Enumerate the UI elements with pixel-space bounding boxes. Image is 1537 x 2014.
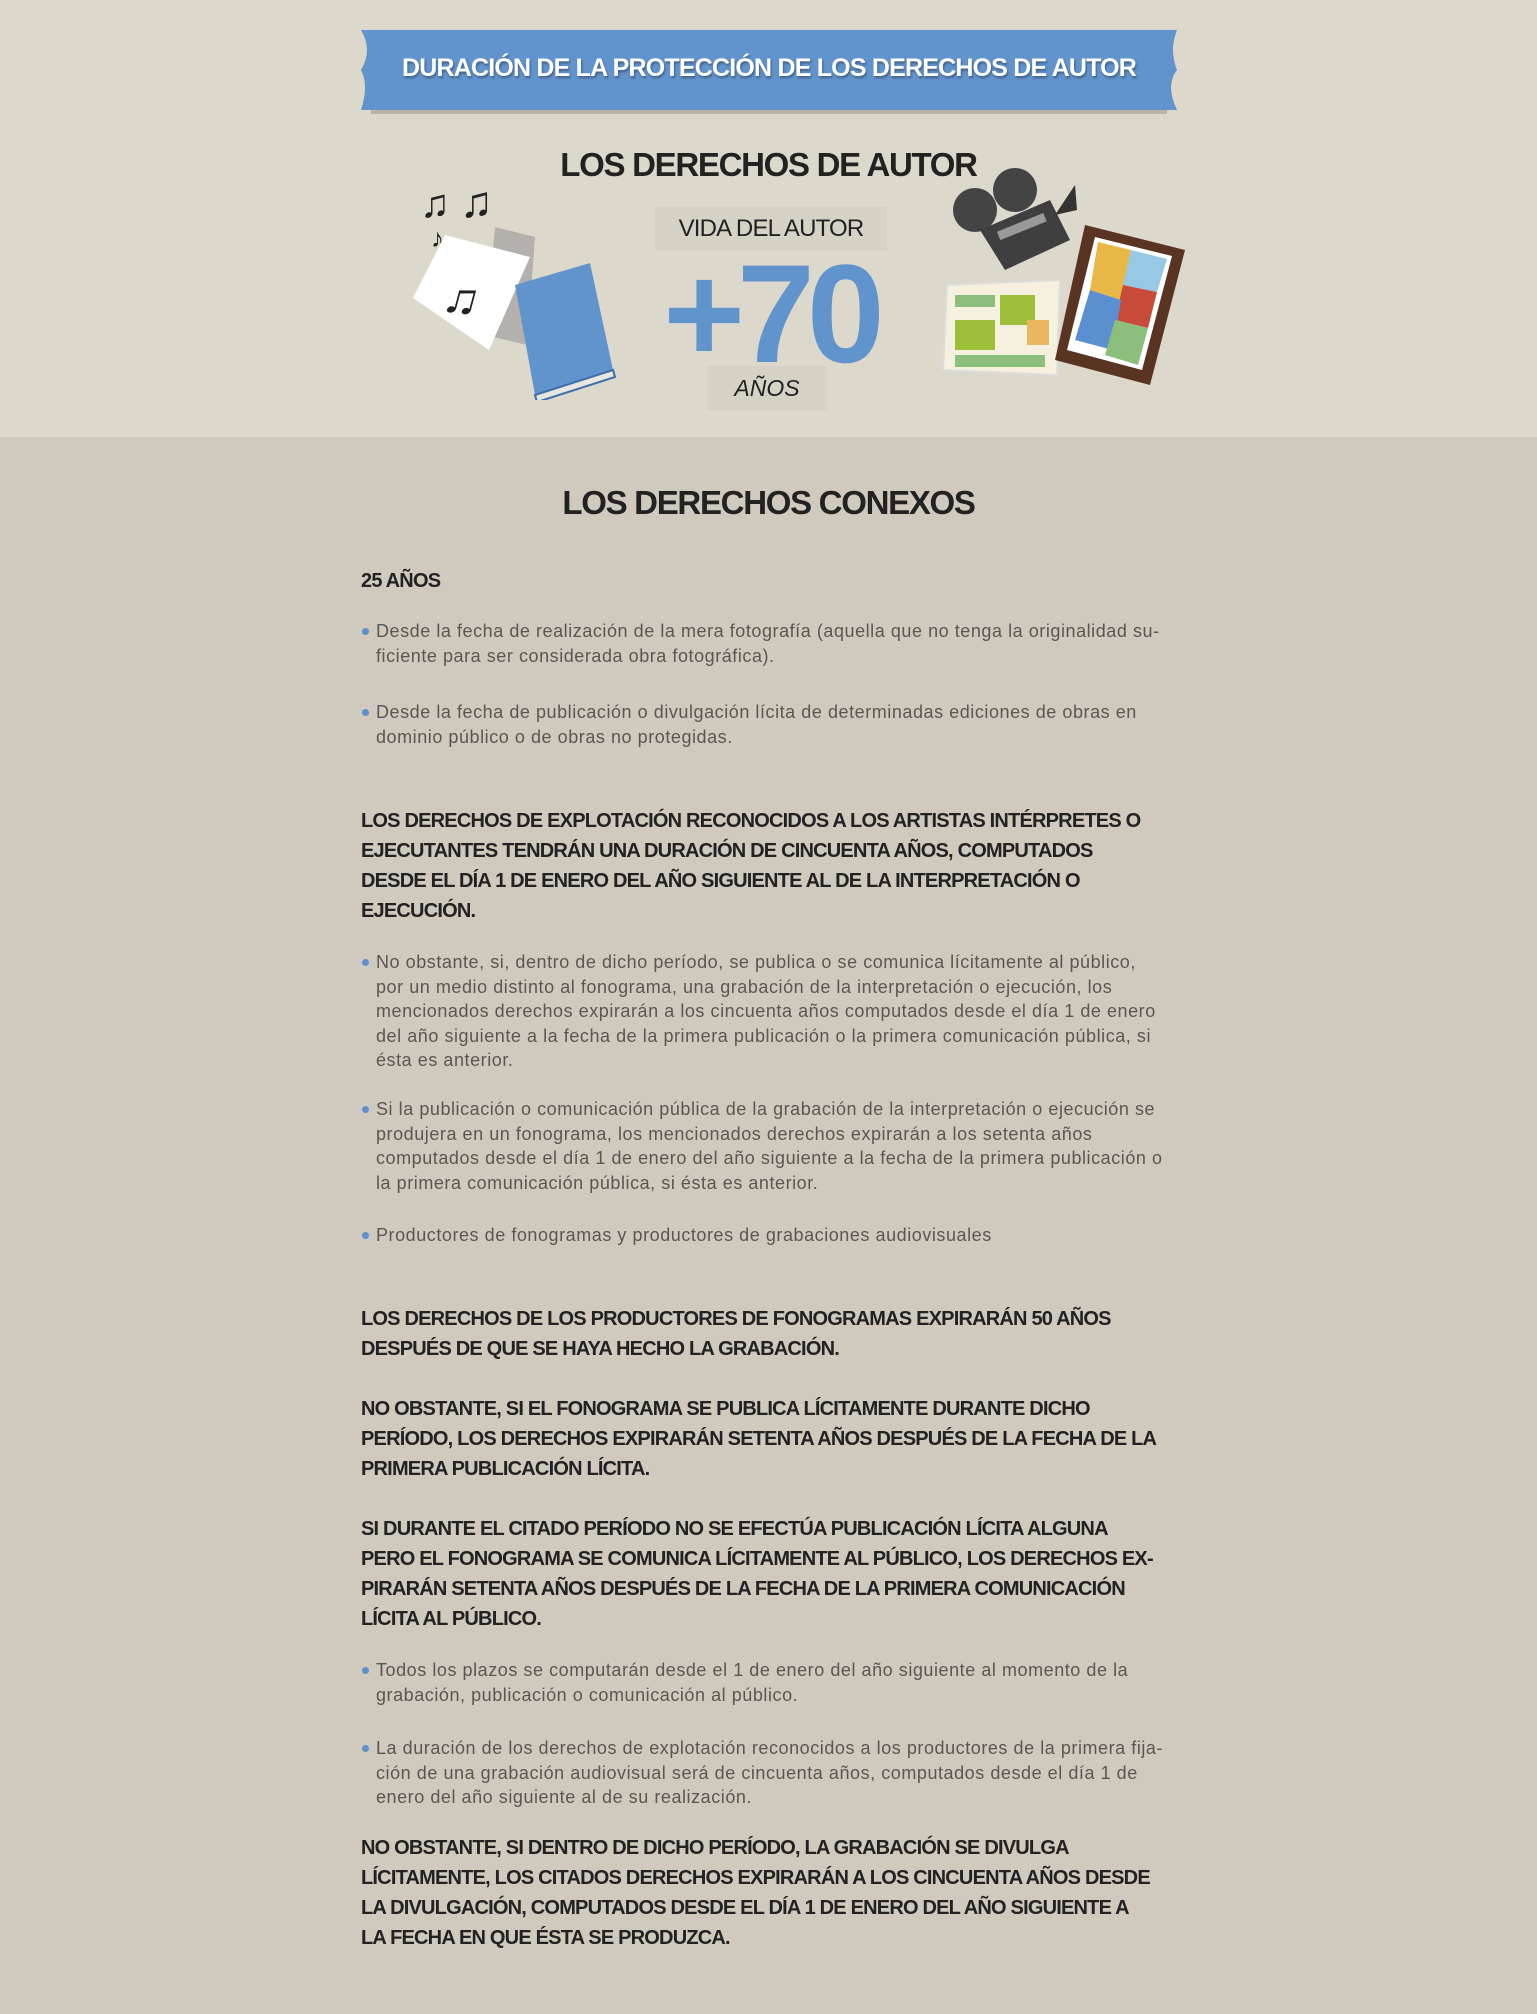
heading: derechos de autor: LOS DERECHOS DE AUTOR [560,146,977,183]
bullet: grabación audiovisual: enero del año siguiente al de su realización. [376,1787,752,1807]
bullet: ediciones: Desde la fecha de publicación o divulgación lícita de determinadas ediciones de obras en [376,702,1137,722]
bullet: grabación audiovisual: ción de una grabación audiovisual será de cincuenta años, computados desde el día 1 de [376,1762,1138,1782]
big number +70: +70 [663,235,877,392]
bold block: artistas intérpretes: DESDE EL DÍA 1 DE ENERO DEL AÑO SIGUIENTE AL DE LA INTERPRETACIÓN O [361,870,1080,892]
bold block: divulgación: NO OBSTANTE, SI DENTRO DE DICHO PERÍODO, LA GRABACIÓN SE DIVULGA [361,1837,1069,1859]
banner [361,30,1177,114]
bullet: fonograma: Si la publicación o comunicación pública de la grabación de la interpretación o ejecución se [376,1099,1155,1119]
bullet: mera fotografía: Desde la fecha de realización de la mera fotografía (aquella que no tenga la originalidad su- [376,621,1160,641]
bold block: publicación lícita: PERÍODO, LOS DERECHOS EXPIRARÁN SETENTA AÑOS DESPUÉS DE LA FECHA DE LA [361,1428,1156,1450]
bullet: no obstante: ésta es anterior. [376,1050,513,1070]
bold block: comunicación pública: SI DURANTE EL CITADO PERÍODO NO SE EFECTÚA PUBLICACIÓN LÍCITA ALGUNA [361,1518,1108,1540]
bold block: artistas intérpretes: EJECUTANTES TENDRÁN UNA DURACIÓN DE CINCUENTA AÑOS, COMPUTADOS [361,840,1093,862]
bullet: mera fotografía: ficiente para ser considerada obra fotográfica). [376,646,775,666]
bold block: artistas intérpretes: LOS DERECHOS DE EXPLOTACIÓN RECONOCIDOS A LOS ARTISTAS INTÉRPRETES O [361,810,1140,832]
bold block: divulgación: LA FECHA EN QUE ÉSTA SE PRODUZCA. [361,1927,730,1949]
bullet: plazos: Todos los plazos se computarán desde el 1 de enero del año siguiente al momento de la [376,1660,1128,1680]
icon: camera, map and painting [942,168,1185,385]
bold block: divulgación: LA DIVULGACIÓN, COMPUTADOS DESDE EL DÍA 1 DE ENERO DEL AÑO SIGUIENTE A [361,1897,1129,1919]
bullet: grabación audiovisual: La duración de los derechos de explotación reconocidos a los productores de la primera fija- [376,1738,1163,1758]
bold block: publicación lícita: PRIMERA PUBLICACIÓN LÍCITA. [361,1458,649,1480]
bullet: fonograma: produjera en un fonograma, los mencionados derechos expirarán a los setenta años [376,1124,1092,1144]
bullet: no obstante: mencionados derechos expirarán a los cincuenta años computados desde el día 1 de enero [376,1001,1156,1021]
bold block: productores 50 años [361,1306,1111,1360]
bullet: no obstante: del año siguiente a la fecha de la primera publicación o la primera comunicación pública, si [376,1026,1151,1046]
bullet: productores: Productores de fonogramas y productores de grabaciones audiovisuales [376,1225,992,1245]
bold block: comunicación pública: PIRARÁN SETENTA AÑOS DESPUÉS DE LA FECHA DE LA PRIMERA COMUNICACIÓN [361,1578,1125,1600]
heading: derechos conexos: LOS DERECHOS CONEXOS [562,484,975,521]
bullet: no obstante [361,950,1156,1072]
bullet: fonograma [361,1097,1163,1195]
icon: music sheet and book: ♫ [460,178,493,227]
bold block: artistas intérpretes [361,808,1140,922]
top panel background [0,0,1537,437]
bold block: productores 50 años: DESPUÉS DE QUE SE HAYA HECHO LA GRABACIÓN. [361,1338,839,1360]
bold block: divulgación: LÍCITAMENTE, LOS CITADOS DERECHOS EXPIRARÁN A LOS CINCUENTA AÑOS DESDE [361,1867,1150,1889]
bullet: fonograma: computados desde el día 1 de enero del año siguiente a la fecha de la primera publicación o [376,1148,1163,1168]
bullet: mera fotografía [361,619,1160,668]
icon: music sheet and book [413,178,616,400]
bullet: ediciones: dominio público o de obras no protegidas. [376,726,733,746]
bold block: productores 50 años: LOS DERECHOS DE LOS PRODUCTORES DE FONOGRAMAS EXPIRARÁN 50 AÑOS [361,1308,1111,1330]
bullet: ediciones [361,700,1137,749]
bullet: grabación audiovisual [361,1736,1163,1810]
bold block: artistas intérpretes: EJECUCIÓN. [361,900,475,922]
banner title: DURACIÓN DE LA PROTECCIÓN DE LOS DERECHOS DE AUTOR [402,54,1136,82]
bullet: plazos: grabación, publicación o comunicación al público. [376,1684,798,1704]
icon: music sheet and book: ♫ [438,269,486,329]
bold block: divulgación [361,1836,1150,1949]
bold block: comunicación pública: PERO EL FONOGRAMA SE COMUNICA LÍCITAMENTE AL PÚBLICO, LOS DERECHOS EX- [361,1548,1153,1570]
vida del autor label: VIDA DEL AUTOR [679,215,863,242]
años label [707,366,827,410]
bullet: fonograma: la primera comunicación pública, si ésta es anterior. [376,1172,818,1192]
años label: AÑOS [734,375,800,401]
bullet: no obstante: por un medio distinto al fonograma, una grabación de la interpretación o ejecución, los [376,976,1112,996]
vida del autor label [655,207,887,251]
bullet: plazos [361,1658,1128,1707]
subheading 25 años: 25 AÑOS [361,570,440,592]
icon: music sheet and book: ♫ [420,182,450,226]
bold block: publicación lícita: NO OBSTANTE, SI EL FONOGRAMA SE PUBLICA LÍCITAMENTE DURANTE DICHO [361,1398,1090,1420]
bold block: comunicación pública: LÍCITA AL PÚBLICO. [361,1608,541,1630]
bullet: no obstante: No obstante, si, dentro de dicho período, se publica o se comunica lícitamente al público, [376,952,1136,972]
bold block: publicación lícita [361,1397,1156,1480]
bold block: comunicación pública [361,1516,1153,1630]
icon: music sheet and book: ♪ [431,223,444,253]
